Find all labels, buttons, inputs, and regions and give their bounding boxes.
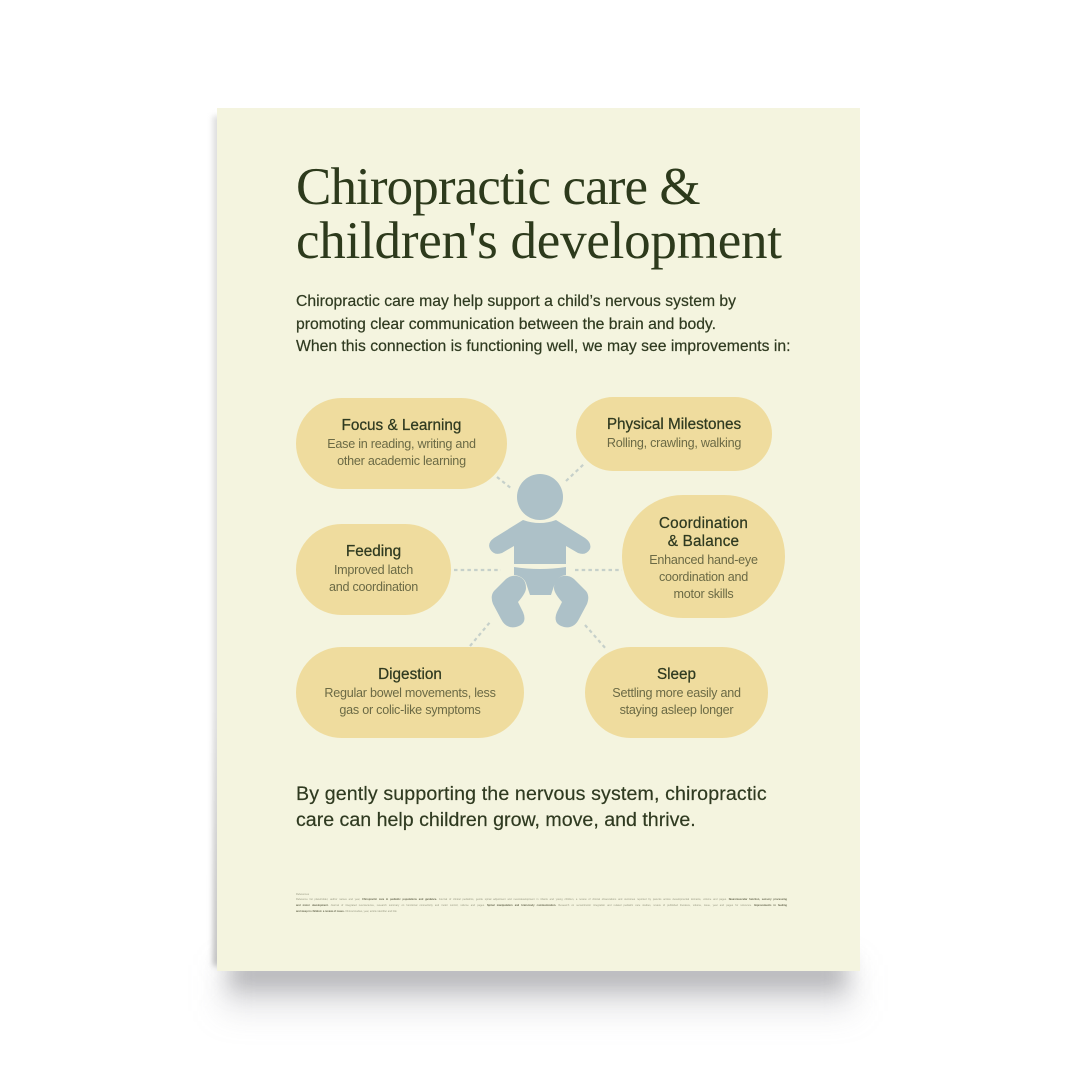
closing statement: care can help children grow, move, and thrive. <box>296 808 696 830</box>
baby diagram with connectors <box>454 464 622 648</box>
references fine print: and sleep in children: a review of cases. Clinical studies, year, article identifier and link. <box>296 910 397 913</box>
intro text <box>296 293 790 355</box>
references fine print: References <box>296 892 309 896</box>
pill: sleep: Settling more easily and <box>612 686 741 700</box>
pill: physical milestones: Rolling, crawling, walking <box>607 436 741 450</box>
pill: focus and learning: Ease in reading, writing and <box>327 436 476 450</box>
pill: focus and learning <box>296 398 507 489</box>
pill: digestion: gas or colic-like symptoms <box>339 703 481 717</box>
pill: sleep <box>585 647 768 738</box>
poster shadow <box>230 955 846 989</box>
pill: physical milestones: Physical Milestones <box>607 416 741 433</box>
intro text: When this connection is functioning well, we may see improvements in: <box>296 338 790 355</box>
pill: feeding: and coordination <box>329 580 418 594</box>
pill: feeding: Feeding <box>346 543 401 560</box>
pill: focus and learning: Focus & Learning <box>342 417 461 434</box>
pill: sleep: staying asleep longer <box>620 703 733 717</box>
poster panel <box>217 108 860 971</box>
intro text: promoting clear communication between the brain and body. <box>296 316 716 333</box>
title: Chiropractic care & <box>296 158 700 216</box>
pill: digestion: Regular bowel movements, less <box>324 686 496 700</box>
intro text: Chiropractic care may help support a child’s nervous system by <box>296 293 736 310</box>
pill: coordination and balance <box>622 495 785 618</box>
pill: digestion: Digestion <box>378 666 442 683</box>
pill: coordination and balance: & Balance <box>668 533 739 550</box>
references fine print: and motor development. Journal of integrated neuroscience, research summary on functional connectivity and motor control, volume and pages. Spinal manipulation and brain-body communication. Research on sensorimotor integration and related pediatric care studies, review of published literature, volume, issue, year and pages for reference. Improvements in feeding <box>296 904 787 907</box>
icon: baby <box>489 474 590 627</box>
references fine print <box>296 892 787 913</box>
pill: coordination and balance: coordination and <box>659 570 748 584</box>
title <box>296 158 782 270</box>
closing statement: By gently supporting the nervous system, chiropractic <box>296 783 767 805</box>
closing statement <box>296 783 767 830</box>
pill: coordination and balance: motor skills <box>674 587 733 601</box>
pill: physical milestones <box>576 397 772 471</box>
pill: digestion <box>296 647 524 738</box>
pill: sleep: Sleep <box>657 666 696 683</box>
connector lines <box>454 463 622 650</box>
pill: coordination and balance: Coordination <box>659 515 748 532</box>
references fine print: Reference list placeholder, author names and year, Chiropractic care in pediatric populations and guidance. Journal of clinical pediatrics, gentle spinal adjustment and neurodevelopment in infants and young children, a review of clinical observations and outcomes reported by parents across developmental domains, volume and pages. Neuromuscular function, sensory processing <box>296 898 787 901</box>
pill: feeding: Improved latch <box>334 562 413 576</box>
pill: coordination and balance: Enhanced hand-eye <box>649 552 758 566</box>
pill: feeding <box>296 524 451 615</box>
pill: focus and learning: other academic learning <box>337 454 466 468</box>
title: children's development <box>296 212 782 270</box>
